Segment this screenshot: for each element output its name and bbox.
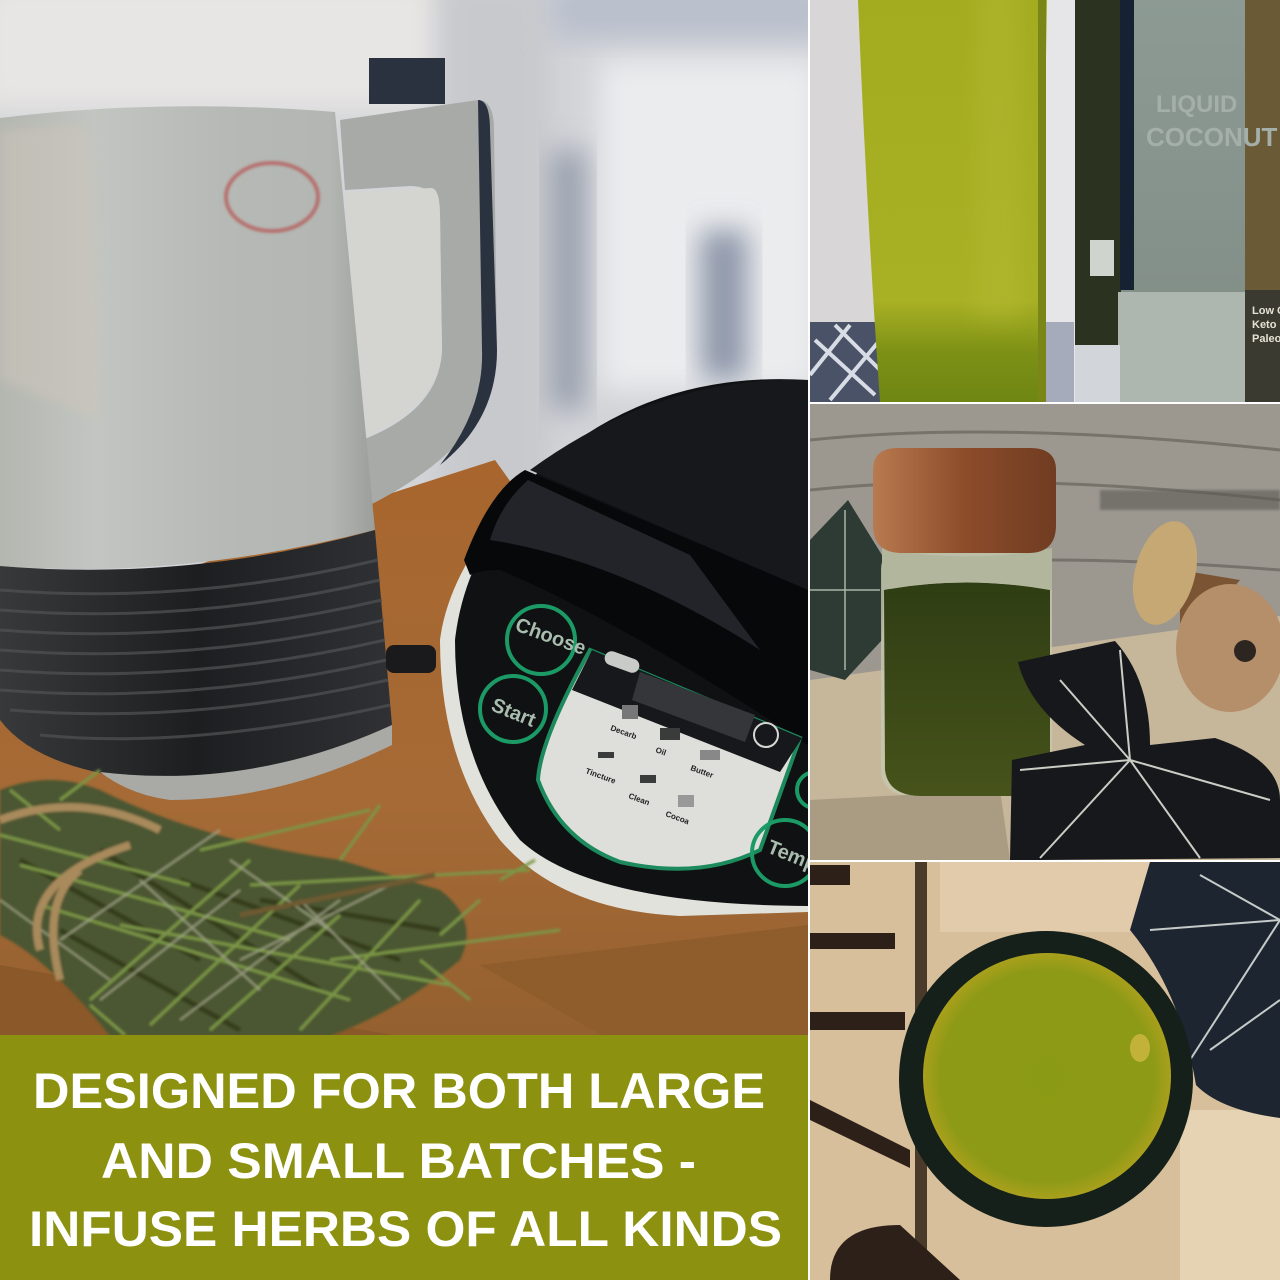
blurred room background bbox=[0, 0, 808, 570]
appliance: Butter bbox=[689, 763, 715, 780]
appliance: Oil bbox=[654, 745, 667, 758]
kettle bbox=[0, 58, 497, 800]
panel: main kettle photo bbox=[0, 0, 833, 1040]
caption text: INFUSE HERBS OF ALL KINDS bbox=[29, 1201, 782, 1257]
coconut oil bottle: Keto bbox=[1252, 319, 1277, 331]
wooden worktop bbox=[0, 460, 808, 1040]
display bbox=[632, 672, 755, 742]
bottle label: LIQUID bbox=[1156, 91, 1237, 118]
cloth bbox=[810, 322, 1074, 402]
appliance bbox=[440, 379, 833, 916]
bottle label: COCONUT bbox=[1146, 122, 1278, 152]
olive oil bottle bbox=[858, 0, 1047, 402]
ivy leaf left bbox=[810, 500, 885, 680]
control panel bbox=[538, 650, 800, 869]
panel labels: Temp bbox=[764, 836, 820, 876]
panel: balm jar on wood bbox=[810, 862, 1280, 1280]
glass jar bbox=[873, 448, 1056, 796]
ivy leaf right bbox=[1010, 641, 1280, 860]
caption text: DESIGNED FOR BOTH LARGE bbox=[33, 1063, 765, 1119]
ivy leaf bbox=[1130, 862, 1280, 1118]
caption banner bbox=[0, 1035, 808, 1280]
appliance: Decarb bbox=[609, 723, 638, 741]
balm jar bbox=[899, 931, 1193, 1227]
caption text: AND SMALL BATCHES - bbox=[101, 1133, 696, 1189]
table bbox=[810, 616, 1280, 860]
panel labels: Start bbox=[488, 694, 539, 732]
panel labels: Choose bbox=[512, 614, 589, 660]
coconut oil bottle bbox=[1075, 0, 1280, 402]
herb bundle bbox=[0, 770, 560, 1036]
panel: oil bottles bbox=[810, 0, 1280, 402]
appliance: Clean bbox=[627, 791, 651, 807]
caption text bbox=[29, 1063, 782, 1257]
appliance: Cocoa bbox=[664, 809, 691, 826]
panel icons bbox=[598, 705, 720, 807]
appliance: Tincture bbox=[584, 766, 617, 786]
wooden spools bbox=[1133, 521, 1280, 712]
panel: jar with wooden lid bbox=[810, 404, 1280, 860]
bottle label bbox=[1147, 95, 1278, 146]
panel labels bbox=[488, 614, 820, 876]
